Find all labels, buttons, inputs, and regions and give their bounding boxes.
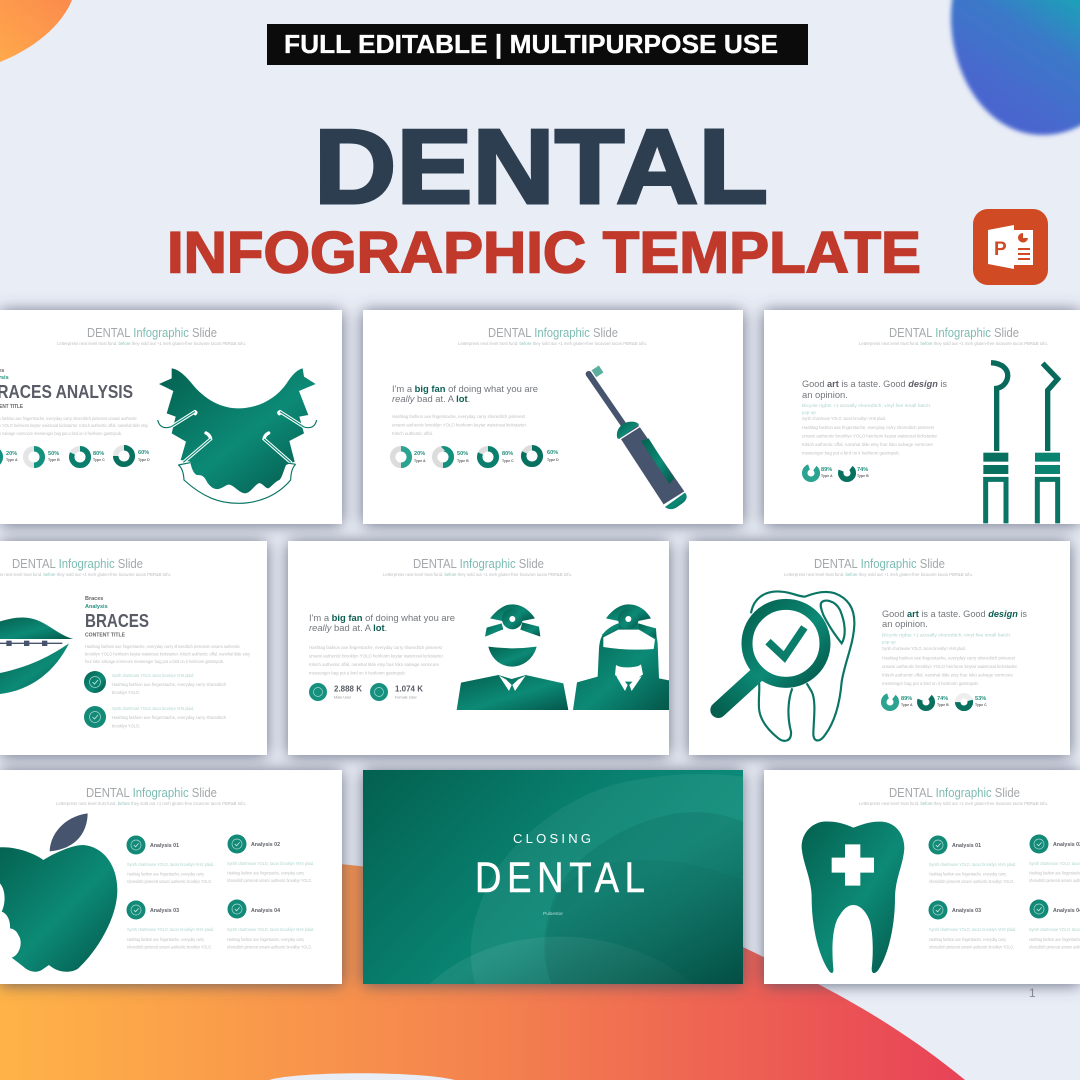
quote (392, 383, 538, 404)
donut: 89% type A (881, 693, 913, 711)
paragraph (392, 414, 527, 436)
slide subheading: Letterpress next level trust fund, before they sold out +1 meh gluten-free locavore tacos PBR&B tofu. (458, 341, 647, 346)
donut: 60% type D (524, 448, 559, 464)
analysis 04: Hashtag fashion axe fingerstache, everyday carry (227, 937, 305, 942)
slide heading: DENTAL Infographic Slide (12, 556, 143, 571)
subtitle: INFOGRAPHIC TEMPLATE (167, 220, 921, 286)
slide heading: DENTAL Infographic Slide (488, 325, 618, 340)
text block: braces: brooklyn YOLO heirloom keytar waistcoat kickstarter. Kitsch authentic offal, narwhal tilde etsy (85, 652, 251, 656)
donut: 20% type A (0, 449, 18, 465)
analysis 04 (227, 900, 314, 950)
donut: 80% type C: 80% (502, 451, 513, 457)
icon: check badge 2 (84, 706, 106, 728)
donut: 80% type C: 80% (93, 451, 104, 457)
analysis 01: Synth chartreuse YOLO, tacos brooklyn VHS plaid. (929, 862, 1016, 867)
quote (882, 608, 1027, 629)
slide 1: braces analysis (0, 310, 342, 524)
donut: 89% type A: 89% (821, 467, 832, 473)
donut: 89% type A: Type A (821, 474, 833, 478)
text block: braces (85, 596, 251, 664)
analysis 04: Analysis 04 (251, 908, 281, 914)
bottom gradient wave (0, 820, 965, 1080)
slide subheading: Letterpress next level trust fund, before they sold out +1 meh gluten-free locavore tacos PBR&B tofu. (784, 572, 973, 577)
analysis 01: Analysis 01 (952, 843, 982, 849)
slide 9: tooth (764, 770, 1080, 984)
closing title: DENTAL (475, 854, 645, 902)
analysis 02: Analysis 02 (251, 842, 280, 848)
text block: braces: BRACES (85, 611, 149, 631)
feature text 1: brooklyn YOLO. (112, 690, 140, 695)
slide subheading: Letterpress next level trust fund, before they sold out +1 meh gluten-free locavore tacos PBR&B tofu. (859, 801, 1048, 806)
closing caption: Pulsestor (543, 911, 564, 916)
illustration: dental braces (158, 368, 317, 503)
analysis 01: shoreditch pinterest umami authentic brooklyn YOLO. (929, 879, 1014, 884)
feature text 1 (112, 673, 227, 695)
icon: PowerPoint (973, 209, 1048, 285)
quote: I'm a big fan of doing what you are (392, 383, 538, 394)
donut: 50% type B (26, 449, 60, 465)
page number: 1 (1029, 986, 1036, 1000)
closing corner shade (363, 770, 743, 984)
icon: check badge 1 (84, 671, 106, 693)
text block: braces: Braces (85, 596, 103, 602)
paragraph (309, 645, 444, 676)
paragraph: Bicycle rights +1 actually shoreditch, vinyl five small batch (802, 403, 931, 408)
paragraph: Synth chartreuse YOLO, tacos brooklyn VHS plaid. (802, 416, 886, 421)
paragraph: umami authentic brooklyn YOLO heirloom keytar waistcoat kickstarter. (882, 664, 1018, 669)
text block: braces: CONTENT TITLE (85, 632, 126, 638)
feature text 2: Hashtag fashion axe fingerstache, everyday carry shoreditch (112, 715, 227, 720)
donut: 50% type B: Type B (48, 458, 60, 462)
slide heading: DENTAL Infographic Slide (413, 556, 544, 571)
donut: 50% type B: 50% (48, 451, 59, 457)
feature text 1: Hashtag fashion axe fingerstache, everyday carry shoreditch (112, 682, 227, 687)
quote: an opinion. (802, 389, 848, 400)
paragraph: messenger bag put a bird on it heirloom gastropub. (802, 450, 900, 456)
quote: really bad at. A lot. (392, 393, 470, 404)
donut: 20% type A (393, 449, 426, 465)
analysis 04 (1029, 900, 1080, 950)
donut: 74% type B (838, 464, 869, 482)
donut: 50% type B: Type B (457, 459, 469, 463)
feature text 2: Synth chartreuse YOLO, tacos brooklyn VHS plaid. (112, 706, 194, 711)
illustration: tooth with cross (802, 822, 904, 973)
analysis 03: Synth chartreuse YOLO, tacos brooklyn VHS plaid. (929, 927, 1016, 932)
paragraph: Kitsch authentic offal, narwhal tilde etsy four loko salvage normcore (309, 662, 440, 667)
feature text 2: brooklyn YOLO. (112, 724, 140, 728)
illustration: bitten apple (0, 813, 117, 972)
analysis 03: Hashtag fashion axe fingerstache, everyday carry (929, 937, 1007, 942)
donut: 60% type D: Type D (138, 458, 150, 462)
donut: 74% type B: Type B (937, 703, 949, 707)
feature text 1: Synth chartreuse YOLO, tacos brooklyn VHS plaid. (112, 673, 194, 678)
slide background (0, 770, 342, 984)
analysis 01 (126, 836, 214, 884)
slide 2: toothbrush (363, 310, 743, 524)
slide subheading: Letterpress next level trust fund, before they sold out +1 meh gluten-free locavore tacos PBR&B tofu. (859, 341, 1048, 346)
stat: male user (309, 683, 362, 701)
donut: 20% type A: 20% (414, 451, 425, 457)
stat: female user: 1.074 K (395, 684, 423, 694)
donut: 50% type B: 50% (457, 451, 468, 457)
slide subheading: Letterpress next level trust fund, before they sold out +1 meh gluten-free locavore tacos PBR&B tofu. (57, 341, 246, 346)
donut: 74% type B: 74% (937, 696, 948, 702)
donut: 20% type A: Type A (414, 459, 426, 463)
donut: 20% type A: Type A (6, 458, 18, 462)
slide heading: DENTAL Infographic Slide (87, 325, 217, 340)
paragraph: Hashtag fashion axe fingerstache, everyday carry shoreditch pinterest (309, 645, 443, 650)
slide background (764, 310, 1080, 524)
donut: 53% type C: 53% (975, 696, 986, 702)
donut: 80% type C (72, 449, 105, 465)
donut: 60% type D: 60% (138, 450, 149, 456)
paragraph: pop-up (882, 640, 896, 644)
slide 4: braces (0, 541, 267, 755)
donut: 80% type C: Type C (93, 458, 105, 462)
analysis 04: shoreditch pinterest umami authentic brooklyn YOLO. (227, 944, 312, 950)
slide heading: DENTAL Infographic Slide (86, 785, 217, 800)
illustration: male dentist (457, 604, 568, 710)
analysis 03: Analysis 03 (952, 908, 982, 914)
paragraph: Hashtag fashion axe fingerstache, everyday carry shoreditch pinterest (392, 414, 526, 419)
paragraph: umami authentic brooklyn YOLO heirloom keytar waistcoat kickstarter. (392, 422, 527, 428)
decorative orange circle (0, 0, 72, 62)
analysis 03: Analysis 03 (150, 908, 180, 914)
analysis 03: Hashtag fashion axe fingerstache, everyday carry (127, 937, 205, 942)
illustration: female dentist (573, 604, 669, 710)
donut: 60% type D: 60% (547, 450, 558, 456)
paragraph: Hashtag fashion axe fingerstache, everyday carry shoreditch pinterest (802, 425, 935, 430)
slide background (0, 541, 267, 755)
quote: really bad at. A lot. (309, 622, 387, 633)
illustration: smile with braces (0, 617, 73, 694)
slide background (288, 541, 669, 755)
feature text 2 (112, 706, 227, 728)
stat: female user: Female User (395, 696, 417, 700)
paragraph: Synth chartreuse YOLO, tacos brooklyn VHS plaid. (882, 646, 966, 651)
donut: 60% type D: Type D (547, 458, 559, 462)
donut: 74% type B: 74% (857, 467, 868, 473)
slide 6: tooth check (689, 541, 1070, 755)
top badge (267, 24, 808, 65)
paragraph (882, 632, 1018, 686)
quote: an opinion. (882, 618, 928, 629)
illustration: tooth with magnifier (718, 591, 854, 741)
analysis 02 (1029, 834, 1080, 883)
analysis 01: Analysis 01 (150, 843, 180, 849)
top badge: FULL EDITABLE | MULTIPURPOSE USE (284, 29, 778, 59)
donut: 89% type A: 89% (901, 696, 912, 702)
quote: I'm a big fan of doing what you are (309, 612, 455, 623)
paragraph: pop-up (802, 410, 816, 415)
main title: DENTAL (314, 108, 768, 226)
analysis 01: shoreditch pinterest umami authentic brooklyn YOLO. (127, 879, 212, 884)
paragraph (802, 403, 938, 456)
analysis 03 (928, 900, 1016, 950)
paragraph: Kitsch authentic offal, narwhal tilde etsy four loko salvage normcore (802, 442, 934, 447)
stat: male user: Male User (334, 696, 352, 700)
decorative blue circle (951, 0, 1080, 135)
slide heading: DENTAL Infographic Slide (814, 556, 945, 571)
slide shadows (0, 310, 1080, 984)
slide background (764, 770, 1080, 984)
analysis 02 (227, 834, 314, 883)
icon: PowerPoint: P (994, 239, 1007, 260)
paragraph: Hashtag fashion axe fingerstache, everyday carry shoreditch pinterest (882, 656, 1016, 660)
donut: 53% type C (957, 695, 987, 709)
paragraph: Kitsch authentic offal, narwhal tilde etsy four loko salvage normcore (882, 672, 1014, 678)
donut: 80% type C (480, 449, 514, 465)
paragraph: umami authentic brooklyn YOLO heirloom keytar waistcoat kickstarter. (309, 654, 444, 658)
paragraph: Bicycle rights +1 actually shoreditch, vinyl five small batch (882, 632, 1011, 638)
paragraph: umami authentic brooklyn YOLO heirloom keytar waistcoat kickstarter. (802, 434, 938, 438)
analysis 02: Hashtag fashion axe fingerstache, everyday carry (227, 870, 305, 876)
text block: braces analysis (0, 368, 149, 436)
donut: 74% type B: Type B (857, 474, 869, 478)
stat: male user: 2.888 K (334, 684, 362, 694)
analysis 03: shoreditch pinterest umami authentic brooklyn YOLO. (127, 944, 212, 950)
analysis 02: Synth chartreuse YOLO, tacos brooklyn VHS plaid. (227, 861, 314, 866)
paragraph: Kitsch authentic offal. (392, 431, 433, 436)
analysis 03: shoreditch pinterest umami authentic brooklyn YOLO. (929, 944, 1014, 950)
illustration: electric toothbrush (589, 365, 687, 509)
text block: braces: Analysis (85, 604, 108, 610)
slide background (689, 541, 1070, 755)
closing background arcs (430, 774, 743, 984)
donut: 60% type D (116, 448, 150, 464)
analysis 01: Synth chartreuse YOLO, tacos brooklyn VHS plaid. (127, 862, 214, 867)
quote: Good art is a taste. Good design is (882, 608, 1027, 619)
slide heading: DENTAL Infographic Slide (889, 325, 1019, 340)
illustration: dental instruments (983, 363, 1060, 523)
slide subheading: Letterpress next level trust fund, before they sold out +1 meh gluten-free locavore tacos PBR&B tofu. (383, 572, 572, 577)
slide background (0, 310, 342, 524)
quote: Good art is a taste. Good design is (802, 378, 947, 389)
text block: braces: Hashtag fashion axe fingerstache, everyday carry shoreditch pinterest umami authentic (85, 644, 240, 649)
slide subheading: Letterpress next level trust fund, before they sold out +1 meh gluten-free locavore tacos PBR&B tofu. (56, 801, 246, 806)
slide 3: dental instruments (764, 310, 1080, 524)
analysis 01 (928, 836, 1016, 884)
closing background (363, 770, 743, 984)
donut: 89% type A (802, 464, 833, 482)
analysis 04: Synth chartreuse YOLO, tacos brooklyn VHS plaid. (227, 927, 314, 932)
paragraph: messenger bag put a bird on it heirloom gastropub. (309, 670, 406, 676)
analysis 01: Hashtag fashion axe fingerstache, everyday carry (929, 872, 1007, 876)
donut: 74% type B (917, 693, 949, 711)
slide heading: DENTAL Infographic Slide (889, 785, 1020, 800)
donut: 53% type C: Type C (975, 703, 987, 707)
donut: 80% type C: Type C (502, 459, 514, 463)
donut: 50% type B (435, 449, 469, 465)
slide background (363, 310, 743, 524)
analysis 03 (126, 900, 214, 950)
donut: 89% type A: Type A (901, 703, 913, 707)
analysis 03: Synth chartreuse YOLO, tacos brooklyn VHS plaid. (127, 927, 214, 932)
closing label: CLOSING (513, 831, 591, 846)
slide 7: apple (0, 770, 342, 984)
quote (309, 612, 455, 633)
text block: braces: four loko salvage normcore messenger bag put a bird on it heirloom gastropub. (85, 659, 224, 664)
analysis 01: Hashtag fashion axe fingerstache, everyday carry (127, 872, 205, 876)
slide 8: closing (363, 770, 743, 984)
paragraph: messenger bag put a bird on it heirloom gastropub. (882, 681, 979, 686)
quote (802, 378, 947, 400)
analysis 02: shoreditch pinterest umami authentic brooklyn YOLO. (227, 878, 312, 883)
stat: female user (370, 683, 423, 701)
slide 5: dentists (288, 541, 669, 755)
donut: 20% type A: 20% (6, 451, 17, 457)
